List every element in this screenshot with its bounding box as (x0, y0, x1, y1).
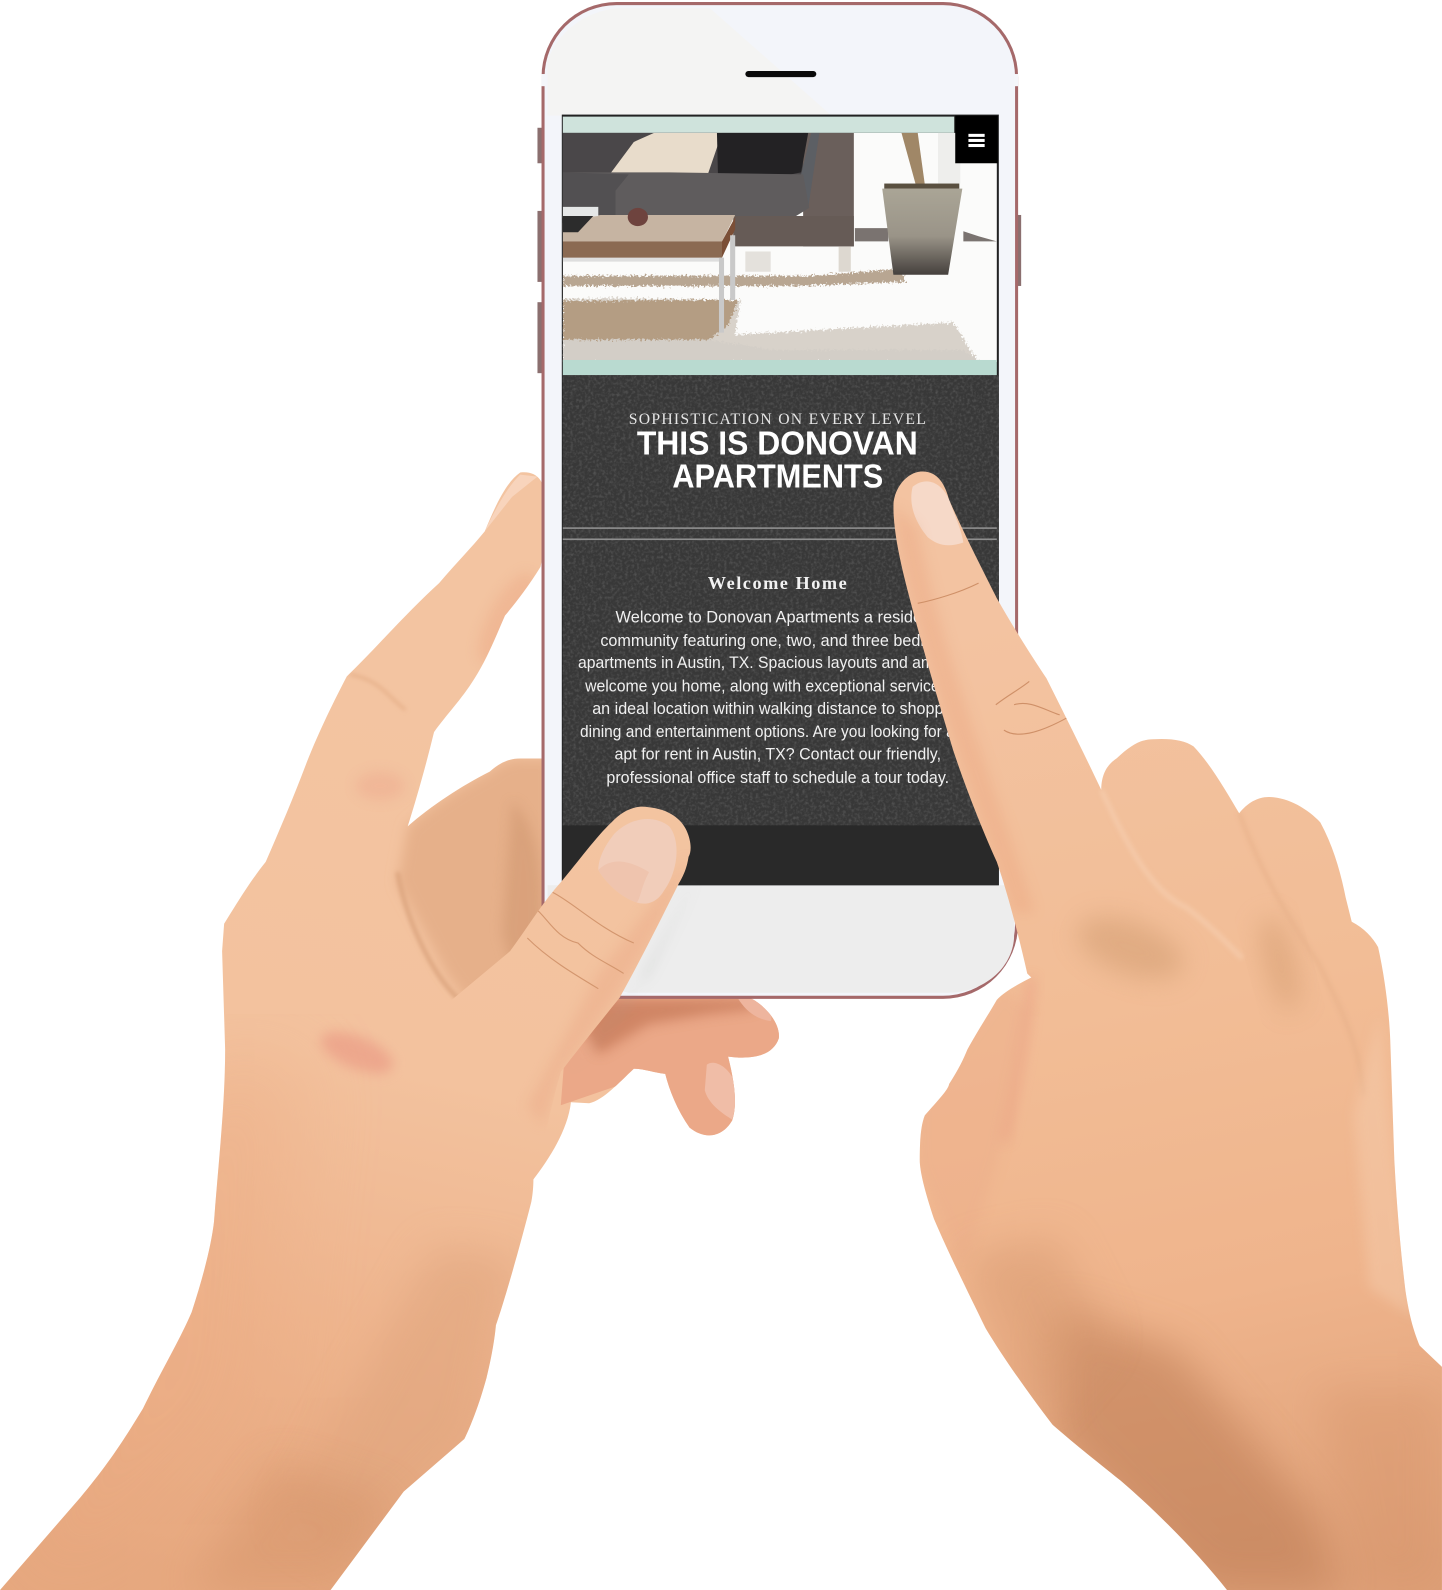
left thumb: knuckle creases (527, 892, 634, 989)
screen: eyebrow heading: SOPHISTICATION ON EVERY LEVEL (629, 411, 926, 428)
right hand: gap between fingers (1101, 790, 1242, 958)
phone: side buttons (537, 128, 1021, 373)
phone: antenna bands (542, 74, 1018, 86)
left thumb: soft shadow on bezel (568, 872, 700, 1075)
screen (562, 115, 999, 885)
icon: menu button (955, 116, 998, 163)
screen: double divider (563, 527, 997, 540)
left hand: fingers below phone (560, 999, 779, 1136)
screen: body copy: community featuring one, two, and three bedroom (600, 632, 957, 650)
screen: body copy: Welcome to Donovan Apartments a residential (616, 609, 952, 627)
screen: dark textured panel (563, 375, 999, 825)
screen: body copy: apartments in Austin, TX. Spacious layouts and amenities (578, 654, 980, 672)
screen: footer bar (563, 825, 999, 885)
left thumb: edge tone (533, 882, 680, 1114)
left thumb in front of phone (454, 806, 691, 1114)
screen: body copy: an ideal location within walking distance to shopping, (592, 700, 969, 718)
left thumb: nail (598, 819, 677, 904)
left hand: shadowed middle finger (398, 758, 542, 993)
screen: sub heading: Welcome Home (708, 573, 847, 593)
right hand: pale edge (1356, 1048, 1408, 1310)
screen: main heading (637, 425, 918, 496)
photo: coffee table ball (628, 208, 648, 226)
screen: mint bottom strip (563, 360, 997, 375)
right hand: finger joint creases (918, 583, 1067, 734)
right hand: thumb knuckle crease (1004, 978, 1031, 1141)
screen: body copy: apt for rent in Austin, TX? Contact our friendly, (615, 746, 941, 764)
right hand: fingertip and nail (911, 481, 963, 545)
left hand behind phone (0, 456, 811, 1590)
phone: rose gold body (542, 2, 1018, 999)
screen: main heading: THIS IS DONOVAN (637, 425, 918, 462)
phone: speaker (745, 71, 816, 77)
phone: white front (545, 5, 1015, 996)
phone: upper glass reflection (548, 8, 832, 116)
screen: living room photo (563, 133, 999, 362)
photo: planter (882, 189, 962, 275)
left hand: palm and arm shading (66, 1028, 512, 1590)
screen: body copy: dining and entertainment options. Are you looking for an (580, 723, 963, 741)
screen: body copy: welcome you home, along with exceptional service and (584, 678, 970, 696)
right hand: wrist shadow band (1055, 1308, 1339, 1590)
right hand pointing at screen (882, 456, 1442, 1590)
right hand: knuckle shadows (1078, 913, 1182, 982)
left hand: fingernails below phone (705, 1063, 735, 1119)
left hand: red knuckle patch (320, 1029, 394, 1076)
screen: body copy (578, 609, 980, 787)
screen: mint top bar (563, 117, 954, 133)
photo: shag rug (563, 269, 979, 362)
phone: lower bezel (548, 885, 1014, 993)
phone (537, 2, 1021, 999)
left hand: index fingernail highlight (485, 475, 537, 531)
right hand: finger edge shading (897, 516, 1026, 907)
screen: body copy: professional office staff to schedule a tour today. (606, 769, 949, 787)
screen: main heading: APARTMENTS (672, 459, 883, 496)
